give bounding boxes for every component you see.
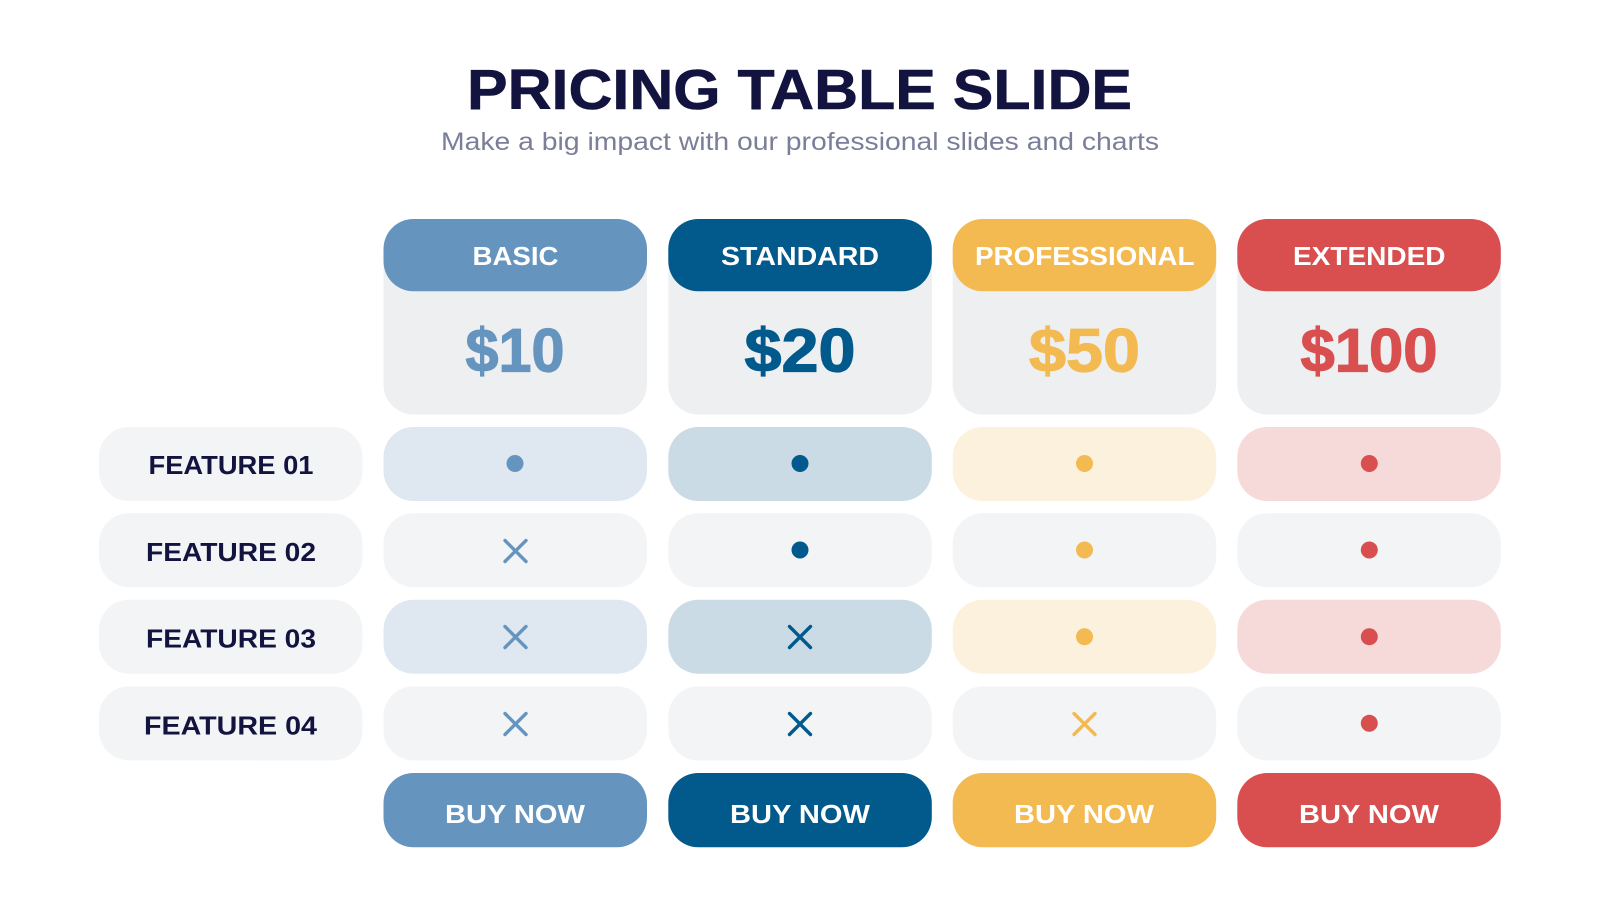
panel: standard plan column — [668, 219, 932, 847]
price: $50: $50 — [1029, 316, 1140, 384]
feature 01 included — [668, 427, 932, 501]
feature 03 excluded — [384, 600, 647, 674]
feature label 02 — [99, 513, 362, 587]
buy button — [953, 773, 1216, 847]
title: PRICING TABLE SLIDE — [467, 58, 1132, 121]
feature label 01 — [99, 427, 362, 501]
feature 04 excluded — [953, 686, 1216, 760]
feature label 04: FEATURE 04 — [144, 710, 318, 740]
buy button: BUY NOW — [1014, 799, 1154, 829]
feature 04 excluded — [384, 686, 647, 760]
header: professional: PROFESSIONAL — [975, 241, 1195, 271]
feature 04 excluded — [668, 686, 932, 760]
buy button — [668, 773, 932, 847]
buy button: BUY NOW — [445, 799, 585, 829]
feature label 03: FEATURE 03 — [146, 624, 316, 654]
panel: basic plan column — [384, 219, 647, 847]
feature 02 included — [953, 513, 1216, 587]
feature 02 included — [668, 513, 932, 587]
feature 03 excluded — [668, 600, 932, 674]
feature 01 included — [953, 427, 1216, 501]
feature 04 included — [1237, 686, 1501, 760]
feature 03 included — [1237, 600, 1501, 674]
panel: extended plan column — [1237, 219, 1501, 847]
feature 02 excluded — [384, 513, 647, 587]
panel: feature labels — [99, 427, 362, 760]
subtitle: Make a big impact with our professional slides and charts — [441, 128, 1159, 156]
header: basic: BASIC — [472, 241, 559, 271]
price card — [668, 219, 932, 414]
buy button: BUY NOW — [1299, 799, 1439, 829]
header: extended: EXTENDED — [1293, 241, 1446, 271]
feature label 01: FEATURE 01 — [148, 450, 314, 480]
feature 01 included — [384, 427, 647, 501]
feature label 03 — [99, 600, 362, 674]
feature label 04 — [99, 686, 362, 760]
buy button — [384, 773, 647, 847]
feature 01 included — [1237, 427, 1501, 501]
header: extended — [1237, 219, 1501, 291]
price: $10: $10 — [466, 316, 564, 384]
header: basic — [384, 219, 647, 291]
price card — [384, 219, 647, 414]
feature 02 included — [1237, 513, 1501, 587]
price card — [953, 219, 1216, 414]
feature label 02: FEATURE 02 — [146, 537, 316, 567]
panel: professional plan column — [953, 219, 1216, 847]
header: standard — [668, 219, 932, 291]
price: $100: $100 — [1300, 316, 1438, 384]
feature 03 included — [953, 600, 1216, 674]
buy button: BUY NOW — [730, 799, 870, 829]
buy button — [1237, 773, 1501, 847]
price: $20: $20 — [744, 316, 856, 384]
price card — [1237, 219, 1501, 414]
header: standard: STANDARD — [721, 241, 879, 271]
header: professional — [953, 219, 1216, 291]
